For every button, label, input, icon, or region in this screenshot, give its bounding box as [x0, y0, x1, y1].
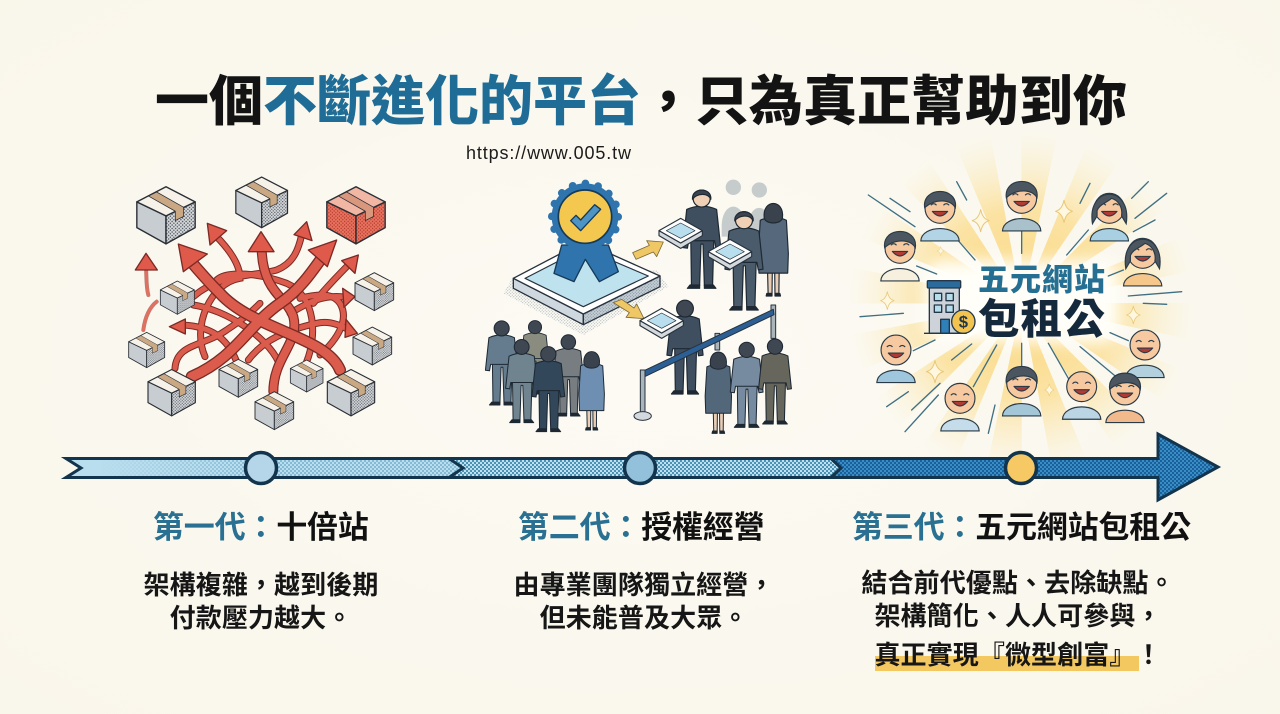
description: 由專業團隊獨立經營， [513, 570, 775, 600]
gold arrows [613, 241, 663, 319]
people [877, 181, 1164, 431]
segment two [449, 458, 841, 478]
segment three with arrowhead [831, 434, 1218, 500]
sparkles [880, 200, 1140, 396]
heading: 第一代：十倍站 [153, 510, 369, 545]
column: third generation [852, 510, 1191, 671]
central glow [923, 260, 1120, 343]
award ribbon badge [552, 183, 618, 282]
heading: 第三代：五元網站包租公 [852, 510, 1191, 545]
column: first generation [144, 510, 378, 633]
panel: tangled first generation structure [129, 177, 394, 430]
cardboard boxes [129, 177, 394, 430]
description: 結合前代優點、去除缺點。 [861, 568, 1175, 598]
faded silhouettes [722, 180, 770, 237]
waiting crowd left [485, 321, 604, 432]
highlight bar [875, 656, 1139, 671]
description: 真正實現『微型創富』！ [874, 640, 1162, 670]
rope barrier [634, 305, 776, 420]
description: 但未能普及大眾。 [540, 603, 748, 633]
arrowheads [135, 222, 358, 337]
tangled red arrows [143, 235, 352, 392]
column: second generation [513, 510, 775, 633]
milestone one [246, 452, 276, 484]
milestone three [1006, 452, 1036, 484]
burst lines [860, 182, 1182, 433]
website url: https://www.005.tw [466, 143, 632, 163]
milestone two [624, 452, 656, 484]
panel: third generation community [860, 181, 1182, 433]
heading: 第二代：授權經營 [518, 510, 764, 545]
building with coin [924, 281, 975, 333]
building with coin: $ [959, 313, 969, 332]
platform with shadow [503, 242, 668, 335]
timeline outline [66, 434, 1218, 500]
timeline arrow [66, 434, 1218, 500]
panel: licensed operators second generation [485, 180, 791, 433]
badge text: 五元網站: 五元網站 [978, 263, 1106, 298]
operators holding tablets [640, 190, 788, 394]
title: 一個不斷進化的平台，只為真正幫助到你 [155, 71, 1127, 132]
waiting crowd right [705, 339, 791, 433]
segment one [71, 460, 460, 476]
description: 架構複雜，越到後期 [144, 570, 378, 600]
description: 付款壓力越大。 [170, 603, 352, 633]
radiating light [935, 217, 1108, 390]
description: 架構簡化、人人可參與， [874, 601, 1162, 631]
badge text: 包租公: 包租公 [978, 296, 1106, 342]
